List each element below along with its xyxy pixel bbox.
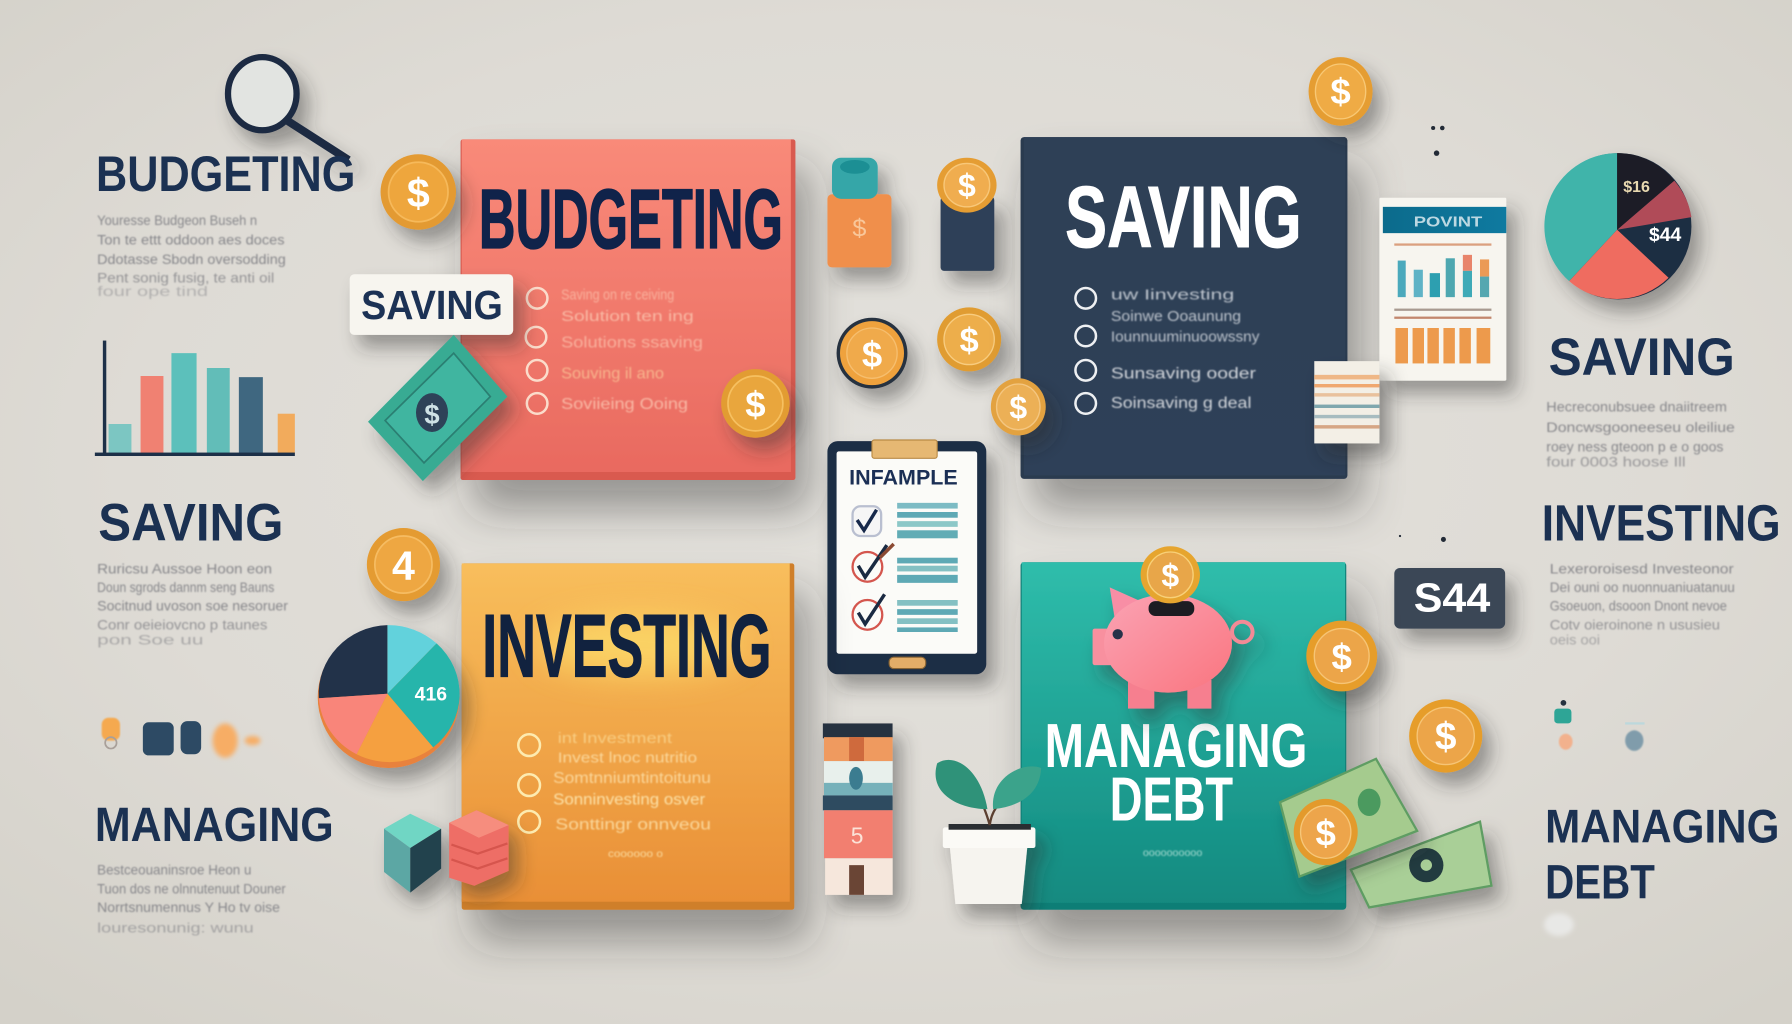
- icon: orange jar: [827, 158, 891, 267]
- body text: Youresse Budgeon Buseh n: [97, 213, 257, 229]
- checklist: Iounnuuminuoowssny: [1111, 330, 1260, 346]
- checklist: Saving on re ceiving: [561, 287, 674, 303]
- checklist: Soviieing Ooing: [561, 396, 688, 413]
- panel heading: BUDGETING: [479, 171, 783, 266]
- coin on bills: [1294, 799, 1358, 865]
- report header: [1383, 207, 1506, 233]
- card: [461, 139, 795, 480]
- icon: striped column: [823, 723, 893, 895]
- pie chart: right: [1544, 153, 1691, 299]
- body text: Ruricsu Aussoe Hoon eon: [97, 562, 272, 578]
- report card: [1379, 198, 1506, 381]
- coin: budgeting panel: [721, 369, 790, 438]
- clipboard: [827, 440, 986, 674]
- clip: [872, 440, 937, 458]
- icon: striped column: 5: [851, 822, 864, 848]
- tag: $44: S44: [1414, 574, 1490, 620]
- icon: orange jar: $: [852, 215, 866, 243]
- small dots: top right: [1431, 126, 1445, 156]
- bar chart: left: [95, 341, 295, 456]
- panel: budgeting: [461, 139, 795, 480]
- body text: Socitnud uvoson soe nesoruer: [97, 598, 288, 614]
- panel heading: DEBT: [1110, 766, 1233, 835]
- body text: four ope tind: [97, 284, 208, 300]
- coin: panel edge: $: [1009, 389, 1027, 425]
- body text: Dei ouni oo nuonnuaniuatanuu: [1550, 580, 1735, 596]
- body text: four 0003 hoose Ill: [1546, 454, 1686, 470]
- coin: dark rim: $: [862, 334, 882, 375]
- body text: Doncwsgooneeseu oleiliue: [1546, 420, 1735, 436]
- checklist: Solutions ssaving: [561, 334, 703, 351]
- pie label: 416: [415, 684, 447, 706]
- right column: managing debt: DEBT: [1545, 856, 1655, 909]
- checklist: Somtnniumtintoitunu: [553, 770, 711, 787]
- body text: Gsoeuon, dsooon Dnont nevoe: [1550, 598, 1727, 614]
- checklist: [526, 287, 703, 414]
- heading: SAVING: [1549, 328, 1735, 387]
- icon: plant: [936, 760, 1041, 904]
- checklist: Sonninvesting osver: [553, 792, 705, 809]
- coin: budgeting panel: $: [745, 384, 766, 425]
- right column: managing debt: [1545, 800, 1779, 909]
- panel heading: SAVING: [1065, 169, 1302, 266]
- checklist: Sonttingr onnveou: [555, 817, 711, 834]
- coin: piggy bank: $: [1161, 557, 1179, 593]
- body text: louresonunig: wunu: [97, 921, 254, 937]
- checklist: [1075, 287, 1260, 414]
- small blurred icons: left: [102, 718, 261, 758]
- coin: piggy bank: [1141, 546, 1200, 603]
- clipboard title: INFAMPLE: [849, 465, 958, 490]
- panel: managing debt: [1021, 562, 1346, 910]
- checklist: Sunsaving ooder: [1111, 365, 1256, 382]
- checklist: coooooo o: [608, 849, 663, 860]
- checklist: Solution ten ing: [561, 309, 694, 325]
- small blurred icons: right: [1544, 700, 1645, 936]
- checklist: Soinwe Ooaunung: [1111, 309, 1241, 325]
- body text: Doun sgrods dannm seng Bauns: [97, 580, 274, 596]
- label: saving chip: SAVING: [361, 282, 503, 328]
- coin: budgeting top: [381, 154, 456, 230]
- body text: Hecreconubsuee dnaiitreem: [1546, 399, 1727, 415]
- body text: pon Soe uu: [97, 633, 203, 649]
- coin: debt right: $: [1332, 637, 1352, 678]
- heading: BUDGETING: [96, 145, 355, 202]
- body text: roey ness gteoon p e o goos: [1546, 439, 1723, 455]
- panel heading: MANAGING: [1045, 712, 1307, 781]
- icon: piggy bank: [1093, 587, 1253, 709]
- heading: MANAGING: [95, 799, 334, 852]
- paper stack: [1314, 361, 1379, 443]
- body text: [1550, 562, 1735, 649]
- checklist: Invest lnoc nutritio: [558, 750, 697, 766]
- panel: saving: [1021, 137, 1347, 479]
- icon: coin on navy cylinder: [937, 158, 997, 271]
- checklist: [518, 731, 711, 860]
- coin: panel edge: [991, 378, 1046, 435]
- pie chart: right: $44: [1649, 224, 1682, 246]
- body text: oeis ooi: [1550, 633, 1600, 649]
- body text: Tuon dos ne olnnutenuut Douner: [97, 882, 286, 898]
- checklist: Soinsaving g deal: [1111, 395, 1251, 412]
- body text: [1546, 399, 1735, 470]
- card: [1021, 137, 1347, 479]
- pot: [943, 824, 1035, 904]
- coin: far right: [1409, 699, 1482, 773]
- icon: cash bills: [1280, 759, 1491, 907]
- icon: coral stack: [449, 810, 509, 886]
- label: saving chip: [350, 274, 513, 335]
- body text: [97, 213, 286, 300]
- front bill: [1280, 759, 1417, 877]
- body text: Norrtsnumennus Y Ho tv oise: [97, 900, 280, 916]
- left column: managing: [95, 799, 334, 937]
- coin on bills: $: [1316, 813, 1336, 854]
- pie labels: $16: [1623, 179, 1650, 196]
- checklist: int Investment: [558, 731, 673, 747]
- body text: Pent sonig fusig, te anti oil: [97, 270, 274, 286]
- back bill: [1351, 822, 1491, 907]
- body text: Ton te ettt oddoon aes doces: [97, 233, 285, 249]
- body text: Conr oeieiovcno p taunes: [97, 618, 267, 634]
- left column: saving: [97, 494, 288, 649]
- body text: Ddotasse Sbodn oversodding: [97, 252, 286, 268]
- checklist: Souving il ano: [561, 365, 664, 382]
- clipboard button: [889, 657, 926, 669]
- heading: SAVING: [98, 494, 283, 553]
- right column: saving: [1546, 328, 1735, 470]
- card: [1021, 562, 1346, 910]
- card: [462, 563, 794, 910]
- body text: [97, 862, 286, 937]
- stem: [983, 805, 997, 825]
- coin: top right: $: [1330, 71, 1351, 112]
- coin: centre: [937, 307, 1001, 371]
- coin: dark rim: [837, 318, 907, 389]
- icon: teal money note: $: [424, 399, 440, 430]
- coin: far right: $: [1435, 716, 1457, 759]
- right column: investing: [1542, 494, 1781, 649]
- leaves: [936, 760, 987, 809]
- body text: [97, 562, 288, 649]
- small dots: mid right: [1399, 535, 1446, 542]
- coin: $: [958, 168, 976, 204]
- check rows: [853, 503, 958, 632]
- pie chart: left: [318, 625, 460, 768]
- fine print: oooooooooo: [1143, 848, 1203, 859]
- coin: top right: [1309, 57, 1373, 126]
- tag: $44: [1394, 568, 1505, 629]
- coin: number 4: 4: [392, 542, 415, 588]
- body text: Bestceouaninsroe Heon u: [97, 862, 251, 878]
- icon: magnifying glass: [228, 57, 349, 160]
- coin: centre: $: [960, 322, 979, 360]
- icon: teal money note: [368, 335, 507, 481]
- left column: budgeting: [96, 145, 355, 300]
- report card: POVINT: [1414, 214, 1482, 230]
- icon: teal cube: [384, 814, 441, 893]
- coin: debt right: [1306, 621, 1377, 691]
- body text: Cotv oieroinone n ususieu: [1550, 618, 1720, 634]
- panel heading: INVESTING: [482, 596, 771, 696]
- title glow: [537, 616, 743, 675]
- panel: investing: [462, 563, 794, 910]
- body text: Lexeroroisesd Investeonor: [1550, 562, 1734, 578]
- checklist: uw Iinvesting: [1111, 287, 1234, 303]
- panel heading: [1045, 712, 1307, 835]
- coin: budgeting top: $: [407, 170, 430, 216]
- report chart: [1394, 243, 1491, 363]
- coin: number 4: [367, 528, 440, 601]
